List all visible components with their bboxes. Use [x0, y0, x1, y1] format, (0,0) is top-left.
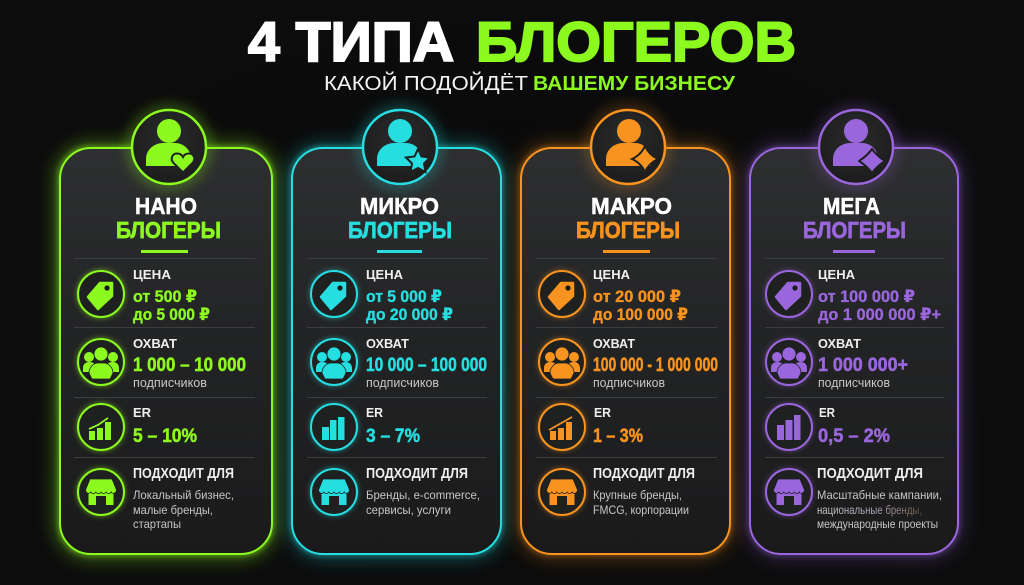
row: price: от 20 000 ₽	[593, 287, 681, 306]
icon: storefront	[311, 469, 357, 515]
icon: price tag	[78, 271, 124, 317]
row: engagement rate	[311, 404, 420, 450]
panel: nano bloggers	[60, 110, 272, 554]
row: suitable for: национальные бренды,	[817, 503, 922, 517]
row: engagement rate: ER	[819, 405, 836, 420]
row: price: до 1 000 000 ₽+	[818, 305, 941, 324]
accent underline	[377, 250, 422, 253]
icon: price tag	[766, 271, 812, 317]
subtitle: КАКОЙ ПОДОЙДЁТ	[324, 71, 529, 95]
row: reach	[539, 336, 718, 390]
row: price	[539, 267, 688, 324]
row: reach: 10 000 – 100 000	[366, 354, 487, 376]
row: suitable for	[78, 465, 234, 531]
row: reach: 1 000 000+	[818, 354, 908, 376]
row: suitable for: сервисы, услуги	[366, 503, 451, 517]
accent underline	[141, 250, 188, 253]
row: reach: ОХВАТ	[366, 336, 409, 351]
row: suitable for: международные проекты	[817, 517, 938, 531]
row: engagement rate	[539, 404, 643, 450]
heading: macro: МАКРО	[591, 193, 672, 219]
row: price	[311, 267, 453, 324]
row: reach: подписчиков	[818, 376, 890, 390]
icon: storefront	[539, 469, 585, 515]
accent underline	[603, 250, 650, 253]
row: suitable for: Масштабные кампании,	[817, 488, 942, 502]
row: reach: 100 000 - 1 000 000	[593, 354, 718, 376]
icon: micro person with star	[363, 110, 437, 184]
row: engagement rate	[78, 404, 197, 450]
row: reach: подписчиков	[133, 376, 207, 390]
heading: nano: НАНО	[135, 193, 197, 219]
row: reach: 1 000 – 10 000	[133, 354, 246, 376]
row: reach: подписчиков	[593, 376, 665, 390]
row: price: до 5 000 ₽	[133, 305, 210, 324]
icon: price tag	[311, 271, 357, 317]
row: suitable for: ПОДХОДИТ ДЛЯ	[366, 465, 468, 482]
heading: bloggers: БЛОГЕРЫ	[116, 217, 221, 243]
icon: audience	[78, 339, 124, 385]
row: price: от 5 000 ₽	[366, 287, 442, 306]
panel: macro bloggers	[521, 110, 730, 554]
icon: storefront	[78, 469, 124, 515]
row: engagement rate: 0,5 – 2%	[818, 425, 890, 447]
heading: micro: МИКРО	[360, 193, 439, 219]
row: suitable for	[539, 465, 695, 517]
row: suitable for: ПОДХОДИТ ДЛЯ	[817, 465, 923, 482]
row: suitable for: Крупные бренды,	[593, 488, 682, 502]
subtitle: ВАШЕМУ БИЗНЕСУ	[533, 72, 735, 95]
title	[248, 10, 796, 73]
row: suitable for: Бренды, e-commerce,	[366, 488, 480, 502]
row: reach: ОХВАТ	[133, 336, 177, 351]
row: engagement rate: 1 – 3%	[593, 425, 643, 447]
icon: nano person with heart	[132, 110, 206, 184]
icon: audience	[539, 339, 585, 385]
row: engagement rate: ER	[133, 405, 152, 420]
row: engagement rate	[766, 404, 890, 450]
row: price: ЦЕНА	[593, 267, 631, 282]
row: suitable for: ПОДХОДИТ ДЛЯ	[593, 465, 695, 482]
icon: storefront	[766, 469, 812, 515]
heading: bloggers: БЛОГЕРЫ	[348, 217, 452, 243]
row: price: ЦЕНА	[366, 267, 404, 282]
row: price: от 500 ₽	[133, 287, 197, 306]
icon: bar chart	[766, 404, 812, 450]
icon: audience	[766, 339, 812, 385]
row: reach: ОХВАТ	[593, 336, 635, 351]
heading: mega: МЕГА	[823, 193, 880, 219]
row: price: до 100 000 ₽	[593, 305, 688, 324]
row: reach: ОХВАТ	[818, 336, 861, 351]
row: price	[78, 267, 210, 324]
row: reach	[311, 336, 487, 390]
icon: macro person with sparkle	[591, 110, 665, 184]
row: suitable for: малые бренды,	[133, 503, 213, 517]
row: engagement rate: 5 – 10%	[133, 425, 197, 447]
row: engagement rate: ER	[366, 405, 384, 420]
title: 4 ТИПА	[248, 10, 454, 73]
row: price: до 20 000 ₽	[366, 305, 453, 324]
row: price: ЦЕНА	[133, 267, 172, 282]
row: price: от 100 000 ₽	[818, 287, 915, 306]
row: suitable for: FMCG, корпорации	[593, 503, 689, 517]
panel: mega bloggers	[750, 110, 958, 554]
subtitle	[324, 71, 735, 95]
heading: bloggers: БЛОГЕРЫ	[803, 217, 906, 243]
icon: bar chart	[311, 404, 357, 450]
icon: mega person with diamond	[819, 110, 893, 184]
heading: bloggers: БЛОГЕРЫ	[576, 217, 680, 243]
panel: micro bloggers	[292, 110, 501, 554]
row: price: ЦЕНА	[818, 267, 856, 282]
row: engagement rate: 3 – 7%	[366, 425, 420, 447]
icon: price tag	[539, 271, 585, 317]
row: suitable for: стартапы	[133, 517, 181, 531]
row: engagement rate: ER	[594, 405, 612, 420]
row: price	[766, 267, 941, 324]
accent underline	[833, 250, 875, 253]
icon: audience	[311, 339, 357, 385]
row: reach	[78, 336, 246, 390]
row: suitable for	[311, 465, 480, 517]
title: БЛОГЕРОВ	[476, 10, 796, 73]
row: reach	[766, 336, 908, 390]
icon: growth chart	[539, 404, 585, 450]
icon: growth chart	[78, 404, 124, 450]
row: suitable for: Локальный бизнес,	[133, 488, 234, 502]
row: suitable for	[766, 465, 942, 531]
row: suitable for: ПОДХОДИТ ДЛЯ	[133, 465, 234, 482]
row: reach: подписчиков	[366, 376, 439, 390]
